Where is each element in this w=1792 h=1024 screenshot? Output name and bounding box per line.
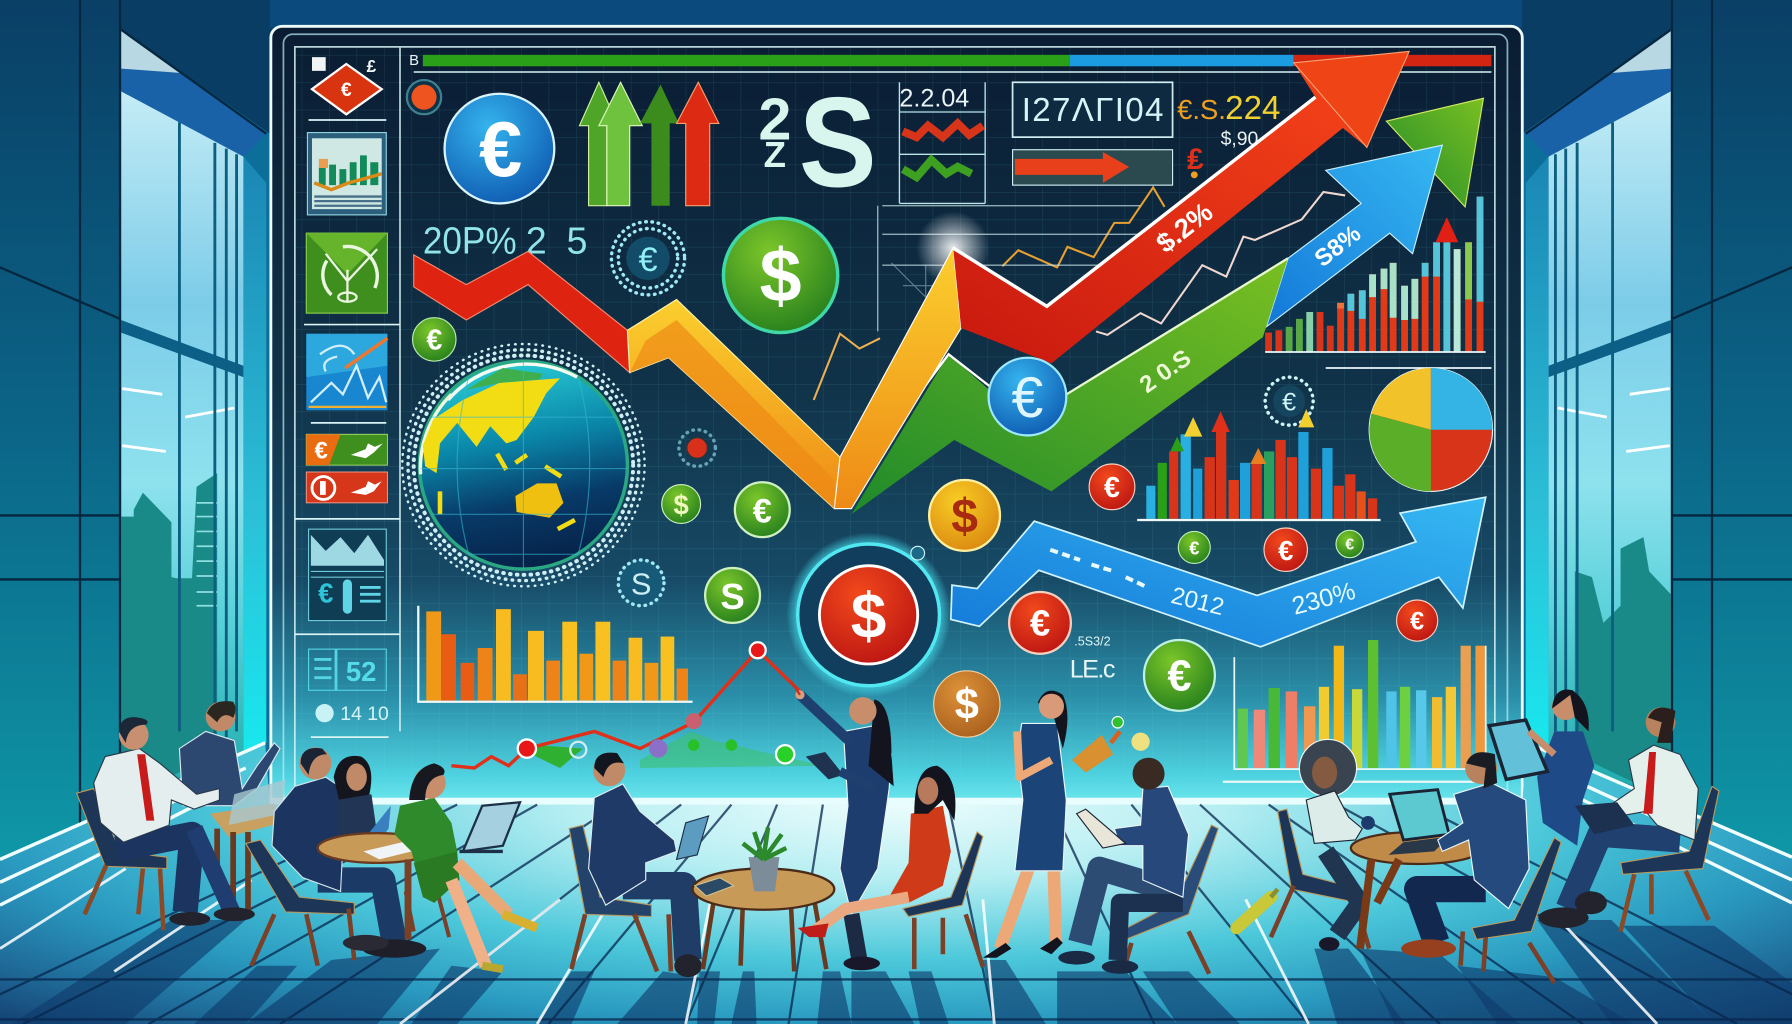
value readouts: €.S. [1177,94,1226,125]
percent label: 2 5 [526,220,587,262]
halftone euro: right: € [1282,388,1296,416]
trend arrow: green [834,258,1288,514]
line chart: lower center: .5S3/2 [1074,635,1111,649]
coins: euro and dollar group: € [1189,537,1199,558]
big 2S heading: S [799,71,877,214]
value readouts: 224 [1225,90,1280,127]
value readouts [1177,90,1280,176]
red indicator dot [407,80,441,114]
trend arrow: red to yellow to red: $.2% [1150,196,1218,259]
euro coin: small green [413,318,456,361]
mini chart panel 2.2.04: 2.2.04 [899,84,969,112]
coins: euro and dollar group: € [1410,608,1424,636]
buttons: euro arrows [306,434,387,503]
halftone euro [611,222,685,295]
thumbnail: text block 52: 52 [346,656,376,687]
coins: euro and dollar group: € [753,492,772,530]
icon: diamond: £ [367,56,377,76]
euro coin: blue on arrow: € [1012,366,1043,430]
small yellow dots [1112,717,1150,751]
euro coin: blue: € [479,107,522,193]
left wall and window [0,0,270,880]
coins: euro and dollar group [618,464,1438,737]
thumbnail: text block 52 [309,649,389,725]
person: woman in red dress [798,766,983,969]
big 2S heading [758,71,877,214]
floor planks [0,805,1792,1024]
dollar coin: large red with ring [786,533,951,697]
big 2S heading: Z [764,134,786,175]
dollar coin: large red with ring: $ [851,580,886,652]
right wall and window [1522,0,1792,880]
globe [402,344,645,586]
trend arrow: blue lower: 2012 [1168,582,1227,621]
thumbnail: mountains and euro [309,529,386,621]
box: red arrow [1013,150,1173,185]
icon: diamond: € [341,79,352,101]
percent label: 20P% [423,220,517,262]
person: bearded man with laptop [1401,752,1561,983]
coins: euro and dollar group: € [1345,537,1354,554]
side table left [210,803,281,914]
target marker [679,430,715,466]
coins: euro and dollar group: € [1030,602,1050,643]
euro coin: blue on arrow [989,358,1066,435]
bar chart: middle right [1137,409,1381,520]
person: bearded man, left [179,701,286,825]
dashboard screen [271,26,1522,815]
bottle on floor [1237,889,1278,928]
top status bar [409,53,1491,69]
trend arrow: green: 2 0.S [1135,344,1196,399]
coins: euro and dollar group: $ [955,681,979,729]
trend arrow: blue lower: 230% [1289,577,1358,621]
bar chart: top right [1265,197,1491,368]
person: woman in green [394,763,537,969]
thumbnail: text block 52: 14 10 [340,703,389,725]
line chart: lower center: LE.c [1070,656,1115,684]
halftone euro: € [638,241,658,279]
thumbnail: chart [307,133,386,215]
floor shadows [11,920,1792,1024]
dollar coin: green [723,218,838,333]
buttons: euro arrows: € [314,437,328,464]
person: presenter woman [791,681,894,970]
coins: euro and dollar group: $ [951,491,978,544]
sidebar [295,56,400,737]
trend arrow: blue: S8% [1310,220,1366,273]
person: woman with afro [1271,739,1375,951]
bar chart: orange [418,606,693,702]
halftone euro: right [1265,377,1313,425]
line chart: lower center [451,635,1115,768]
trend arrow: blue [1266,145,1442,327]
mini chart panel 2.2.04 [899,82,985,203]
thumbnail: blue chart [306,334,387,410]
number box: I27ΛΓI04 [1022,92,1163,129]
trend arrow: green head [1386,98,1483,207]
number box [1013,82,1173,137]
person: man in white shirt, left [77,717,255,930]
pie chart [1369,368,1493,491]
trend arrow: red to yellow to red [414,51,1409,509]
person: man in white shirt, right [1538,707,1719,931]
coins: euro and dollar group: $ [674,489,689,520]
person: man and woman at left table [246,747,426,966]
coins: euro and dollar group: € [1278,535,1293,566]
big 2S heading: 2 [758,85,791,152]
icon: diamond [312,56,382,114]
trend arrow: blue lower [951,497,1486,647]
coins: euro and dollar group: € [1104,472,1120,504]
floor [0,743,1792,1024]
thumbnail: mountains and euro: € [318,577,333,608]
euro coin: small green: € [426,325,442,357]
top status bar: B [409,53,419,69]
round table with plant [693,827,834,971]
round table: right [1351,790,1483,949]
value readouts: $,90 [1221,128,1259,150]
person: man with tablet, center left [569,753,709,977]
euro coin: blue [445,94,554,203]
percent label [423,220,587,262]
person: woman holding tablet [1489,690,1594,846]
person: man with dark skin seated [1058,758,1218,974]
dollar coin: green: $ [760,234,802,318]
thumbnail: green gauge [306,233,387,313]
coins: euro and dollar group: S [720,576,745,617]
coins: euro and dollar group: S [631,566,651,601]
person: standing woman in blue dress [983,691,1120,958]
value readouts: ₤ [1187,143,1204,176]
up arrows [579,82,719,206]
coins: euro and dollar group: € [1167,652,1191,700]
round table: left [318,833,437,939]
thin line charts [814,171,1345,400]
bar chart: pale lower right [1223,640,1491,782]
